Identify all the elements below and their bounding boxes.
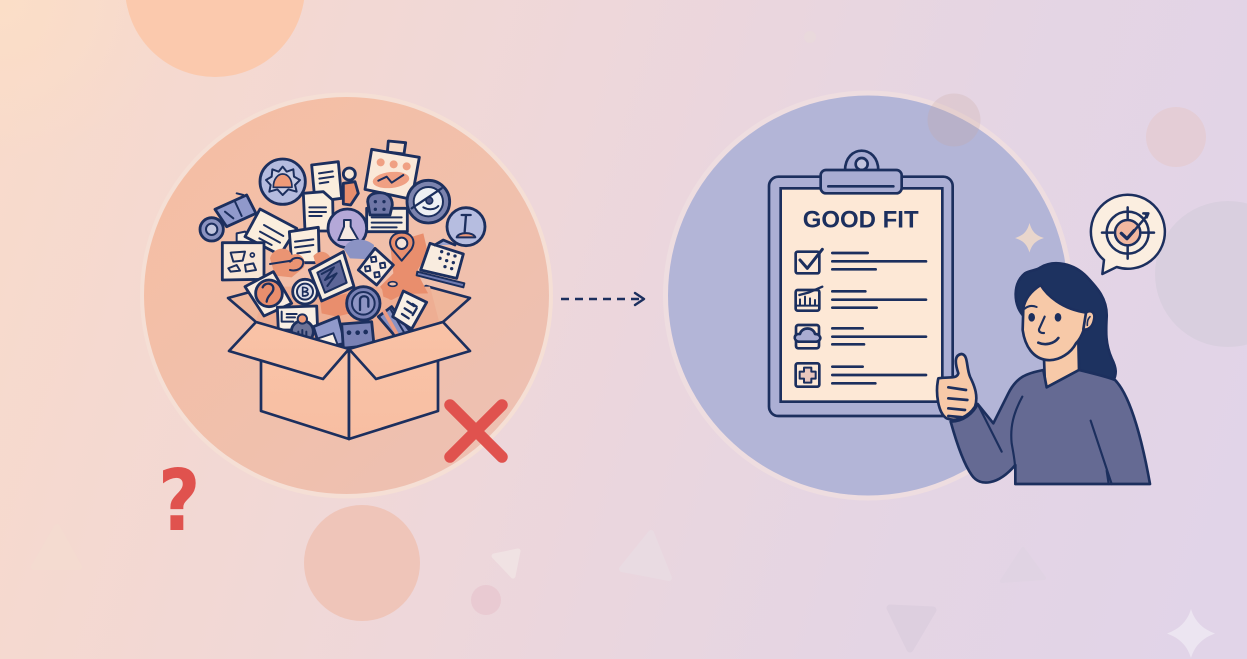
framed chart card [309,252,354,301]
book stripes [378,307,412,340]
map card [222,243,264,280]
sweater folds [978,397,1112,484]
document middle [303,192,333,231]
icon: white sparkle [1167,609,1215,658]
orange blobs behind pile [320,233,428,317]
open cardboard box [229,322,470,439]
peach filler behind pile [255,287,440,350]
row 2: chart [796,287,926,311]
ear [1083,311,1094,330]
icon: red cross [450,405,502,457]
numbered card [393,291,427,329]
person token [343,168,358,205]
arrow and check [1121,213,1148,239]
left circle halo [140,92,553,498]
ring icon [200,218,223,241]
document behind robot [367,208,407,232]
clipboard [769,151,953,416]
heading: good fit: GOOD FIT [803,207,919,234]
neck [1044,340,1079,387]
face [1023,285,1087,360]
document top [312,162,342,202]
grid card [358,248,393,285]
row 4: medical plus [796,363,926,387]
tilted note [237,209,297,255]
note sheet [289,227,319,263]
thumbs-up hand [937,354,976,420]
gear badge [260,159,305,204]
pile of mixed icons and documents [200,141,485,350]
helmet badge [291,314,313,343]
location pin [390,233,413,261]
person giving thumbs up [937,263,1150,484]
blue cloud [344,239,374,259]
question card [245,272,292,316]
ringed coin [347,287,380,320]
sweater [951,370,1150,484]
orange head silhouette [270,249,332,277]
right eye [1055,313,1061,322]
row 3: cloud [795,325,926,348]
target rings [1102,207,1154,259]
back box flaps [228,286,470,349]
icon: beige sparkle [1015,223,1044,252]
eyebrow [1025,306,1037,309]
translucent accent circle [928,94,980,146]
smile [1038,338,1058,344]
target badge [407,180,450,223]
panel: unsorted box circle [140,92,553,498]
ear detail [1087,317,1090,325]
robot badge [368,193,392,215]
right circle halo [663,90,1073,500]
left circle fill [144,97,549,494]
id card [277,306,318,330]
clipboard paper [781,188,942,402]
row 1: check [796,249,926,273]
bubble [1091,195,1165,274]
icon: red question mark: ? [158,451,200,550]
dashed arrow [561,293,644,305]
flask badge [328,209,367,248]
poster card [365,141,419,199]
box left front flap [229,322,349,379]
box right front flap [349,322,470,379]
box right face [349,349,438,439]
panel: good fit circle [663,90,1073,500]
right circle fill [668,96,1068,496]
folder icon [215,193,256,227]
orange paw blob [382,280,428,300]
hair [1016,263,1116,381]
building card [417,240,464,287]
speech bubble with target [1091,195,1165,274]
bottom robot [342,322,374,348]
left eye [1028,313,1035,322]
clipboard clip [821,151,902,193]
blue document [313,317,345,348]
hourglass badge [447,208,485,246]
box left face [261,349,349,439]
coin [293,279,317,304]
nose [1039,317,1045,333]
clipboard board [769,177,953,416]
